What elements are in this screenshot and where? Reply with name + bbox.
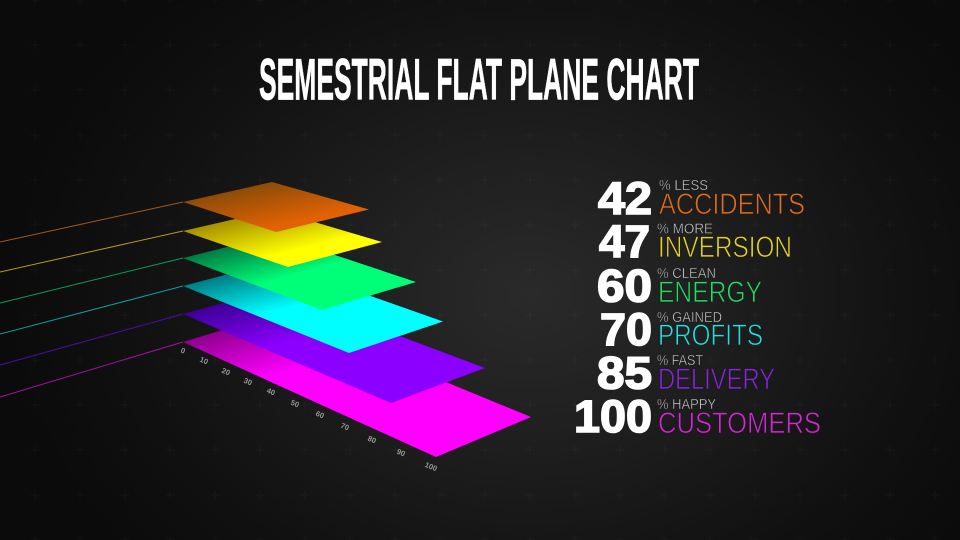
- plane: yellow inversion: [183, 210, 382, 267]
- axis labels: 60: [314, 409, 325, 420]
- axis labels: 30: [242, 376, 253, 387]
- axis labels: 50: [289, 398, 300, 409]
- axis labels: 10: [198, 355, 209, 366]
- stat: 47 inversion: % MORE: [657, 220, 713, 238]
- stat: 60 energy: [597, 260, 762, 312]
- stat: 70 profits: % GAINED: [657, 309, 722, 326]
- stat: 60 energy: % CLEAN: [657, 265, 716, 282]
- plane: purple delivery: [183, 289, 485, 403]
- stat: 85 delivery: [597, 348, 775, 398]
- stat: 100 customers: 100: [574, 391, 652, 442]
- plane: orange accidents: [183, 182, 369, 232]
- stat: 100 customers: CUSTOMERS: [658, 407, 821, 440]
- stat: 47 inversion: 47: [599, 216, 650, 267]
- plane: cyan profits: [183, 262, 443, 353]
- stat: 100 customers: [574, 391, 821, 442]
- stat: 70 profits: 70: [600, 304, 652, 355]
- plane: green energy: [183, 235, 416, 310]
- stat: 47 inversion: INVERSION: [658, 231, 792, 264]
- stat: 42 accidents: [598, 173, 805, 224]
- leader lines: [0, 202, 183, 397]
- axis labels: 100: [423, 460, 438, 473]
- plane: magenta customers: [183, 313, 531, 457]
- axis labels: 90: [395, 447, 406, 458]
- chart: flat plane stack: [0, 182, 531, 473]
- stat: 47 inversion: [599, 216, 792, 267]
- stat: 42 accidents: ACCIDENTS: [659, 188, 805, 221]
- stat: 100 customers: % HAPPY: [657, 396, 716, 413]
- stat: 85 delivery: DELIVERY: [658, 363, 775, 396]
- axis labels: 40: [265, 386, 276, 397]
- stats list: [574, 173, 821, 442]
- stat: 42 accidents: 42: [598, 173, 652, 224]
- stat: 60 energy: 60: [597, 260, 652, 312]
- stat: 60 energy: ENERGY: [658, 276, 762, 309]
- axis labels: 70: [339, 421, 350, 432]
- stat: 42 accidents: % LESS: [659, 177, 708, 194]
- axis labels: 0: [179, 346, 187, 356]
- axis labels: 20: [220, 366, 231, 377]
- axis labels: 80: [366, 434, 377, 445]
- stat: 85 delivery: % FAST: [657, 352, 703, 369]
- stat: 70 profits: PROFITS: [658, 319, 763, 352]
- stat: 85 delivery: 85: [597, 348, 652, 398]
- axis labels: [179, 346, 438, 473]
- stat: 70 profits: [600, 304, 763, 355]
